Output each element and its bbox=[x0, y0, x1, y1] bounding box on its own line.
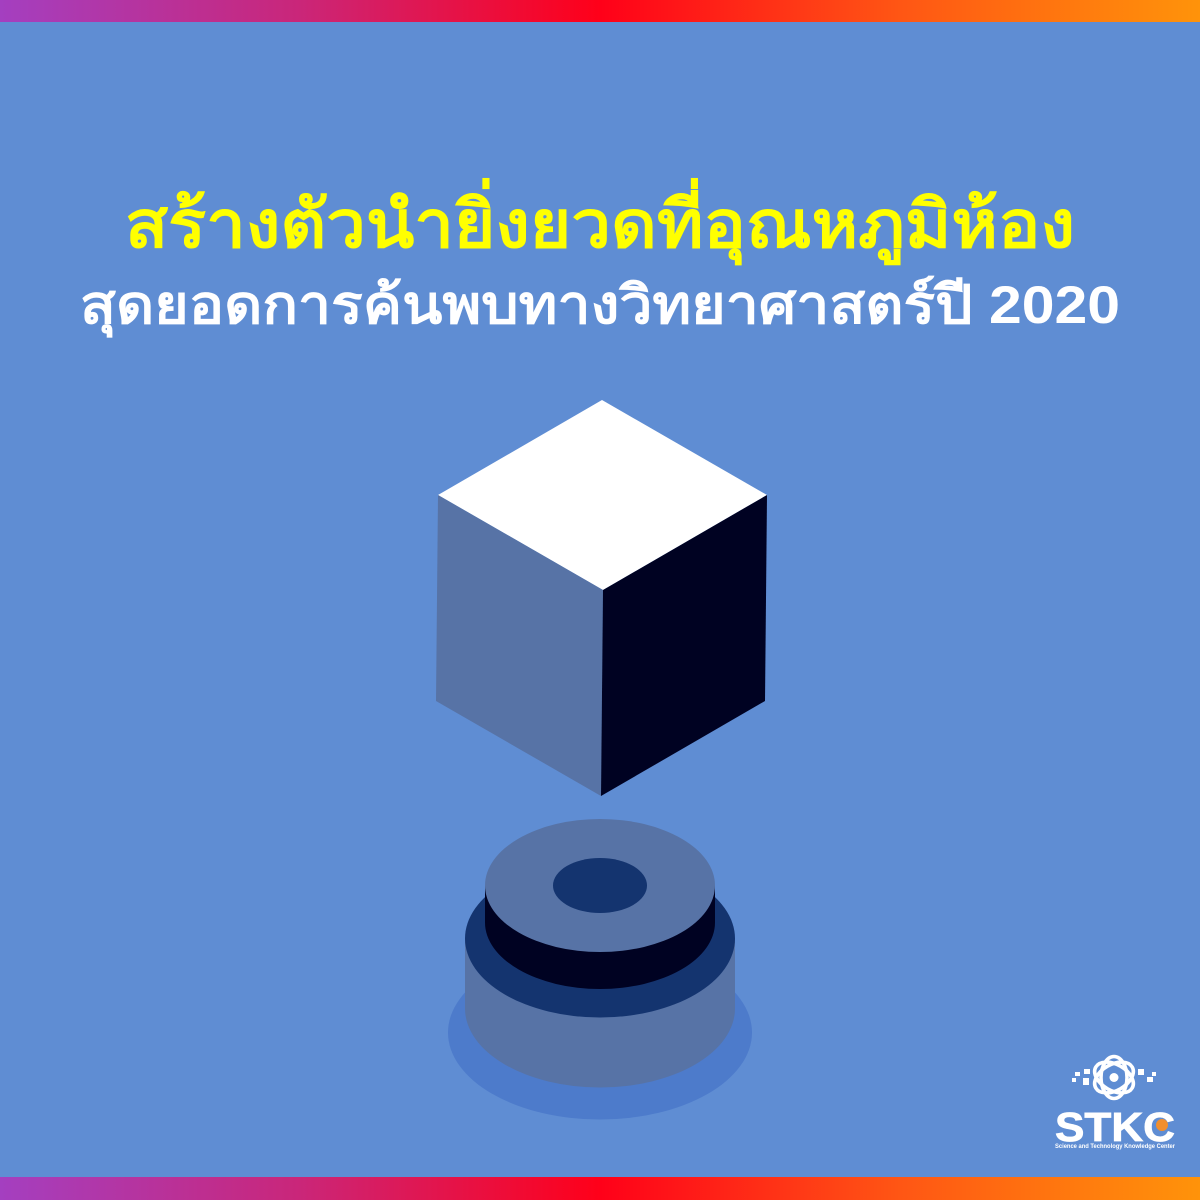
title: สร้างตัวนำยิ่งยวดที่อุณหภูมิห้อง bbox=[125, 177, 1075, 266]
top gradient bar bbox=[0, 0, 1200, 22]
illustration: levitating cube bbox=[436, 400, 767, 796]
bottom gradient bar bbox=[0, 1177, 1200, 1200]
logo: STKC bbox=[1055, 1056, 1176, 1150]
illustration: superconductor base bbox=[448, 819, 752, 1120]
logo tagline: Science and Technology Knowledge Center bbox=[1055, 1144, 1176, 1150]
logo wordmark: STKC bbox=[1055, 1104, 1175, 1150]
subtitle: สุดยอดการค้นพบทางวิทยาศาสตร์ปี 2020 bbox=[80, 276, 1120, 338]
icon: orange dot bbox=[1156, 1119, 1168, 1131]
icon: atom bbox=[1072, 1056, 1156, 1099]
